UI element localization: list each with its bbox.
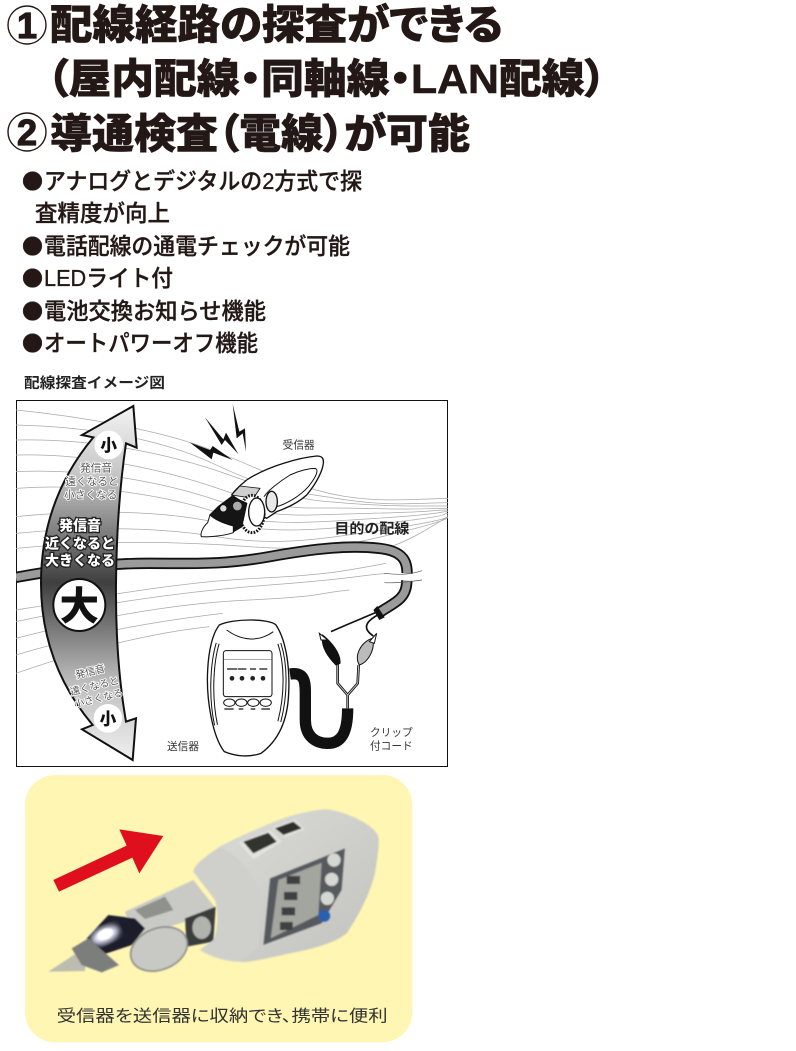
text: far quieter top: 小さくなる <box>64 489 117 501</box>
title: feature headings: （屋内配線・同軸線・LAN配線） <box>47 56 606 102</box>
feature bullet list: 査精度が向上 <box>35 200 170 226</box>
icon: sound burst <box>190 404 246 460</box>
text: far quieter bottom: 遠くなると <box>69 674 120 698</box>
text: closer louder: 近くなると <box>45 535 115 551</box>
label: clip cord <box>370 727 413 752</box>
label: receiver: 受信器 <box>283 439 315 452</box>
nozzle <box>201 515 233 537</box>
led head <box>87 915 145 955</box>
small circle bottom <box>94 704 122 733</box>
label: target wire: 目的の配線 <box>334 520 409 536</box>
feature bullet list: 電話配線の通電チェックが可能 <box>44 233 350 259</box>
panel icons <box>280 876 300 930</box>
dial housing <box>185 907 216 947</box>
small circle bottom: 小 <box>100 709 117 728</box>
label: clip cord: クリップ <box>370 727 413 739</box>
title: feature headings <box>8 2 606 157</box>
socket frames <box>238 830 282 859</box>
text: far quieter top: 遠くなると <box>65 475 119 488</box>
dial <box>124 919 194 979</box>
feature bullet list: オートパワーオフ機能 <box>44 330 258 356</box>
icon: transmitter <box>207 620 289 756</box>
label: clip cord: 付コード <box>370 739 413 752</box>
small circle top: 小 <box>100 436 117 455</box>
buttons <box>321 853 341 905</box>
number 2: 2 <box>17 112 37 153</box>
feature bullet list: ● <box>22 263 43 293</box>
number 1 <box>8 5 46 46</box>
feature bullet list: LEDライト付 <box>44 265 173 291</box>
transmitter body <box>193 809 379 962</box>
text: far quieter bottom: 発信音 <box>74 662 106 682</box>
label: transmitter: 送信器 <box>167 740 199 753</box>
feature bullet list: ● <box>22 166 43 196</box>
text: far quieter bottom <box>69 662 124 711</box>
number 1: 1 <box>17 5 37 46</box>
cone tip <box>48 947 87 972</box>
side shading <box>193 847 262 962</box>
background bundled wires <box>16 410 448 673</box>
icon: clips <box>319 612 378 665</box>
number 2 <box>8 112 46 153</box>
photo caption: 受信器を送信器に収納でき、携帯に便利 <box>57 1007 388 1026</box>
window <box>232 486 260 498</box>
feature bullet list: アナログとデジタルの2方式で探 <box>44 168 362 194</box>
feature bullet list: ● <box>22 328 43 358</box>
black head <box>210 497 247 532</box>
text: closer louder: 発信音 <box>59 518 101 534</box>
receiver stick <box>125 880 216 935</box>
title: feature headings: 導通検査（電線）が可能 <box>50 111 470 157</box>
large circle <box>53 579 105 631</box>
feature bullet list: ● <box>22 296 43 326</box>
panel face <box>263 848 345 945</box>
icon: cord <box>290 663 359 743</box>
receiver body <box>232 456 323 518</box>
title: feature headings: 配線経路の探査ができる <box>50 2 503 48</box>
red arrow <box>53 829 163 892</box>
text: far quieter bottom: 小さくなる <box>73 687 124 711</box>
feature bullet list: ● <box>22 231 43 261</box>
text: far quieter top: 発信音 <box>80 462 112 475</box>
photo: receiver in transmitter <box>48 809 379 979</box>
wire cut mark <box>384 571 422 583</box>
text: closer louder <box>45 518 115 569</box>
receiver inner loop <box>264 468 317 507</box>
icon: receiver <box>201 456 323 537</box>
text: closer louder: 大きくなる <box>45 553 115 569</box>
volume arrow <box>41 406 137 760</box>
diagram caption: 配線探査イメージ図 <box>24 374 165 392</box>
text: far quieter top <box>64 462 119 501</box>
panel: storage photo <box>25 775 412 1042</box>
small circle top <box>94 431 123 459</box>
feature bullet list: 電池交換お知らせ機能 <box>44 298 266 324</box>
panel: wiring search diagram <box>16 400 448 767</box>
feature bullet list <box>22 166 362 358</box>
dial <box>240 495 264 533</box>
sockets <box>243 833 277 853</box>
large circle: 大 <box>60 585 99 629</box>
target wire <box>16 547 422 620</box>
